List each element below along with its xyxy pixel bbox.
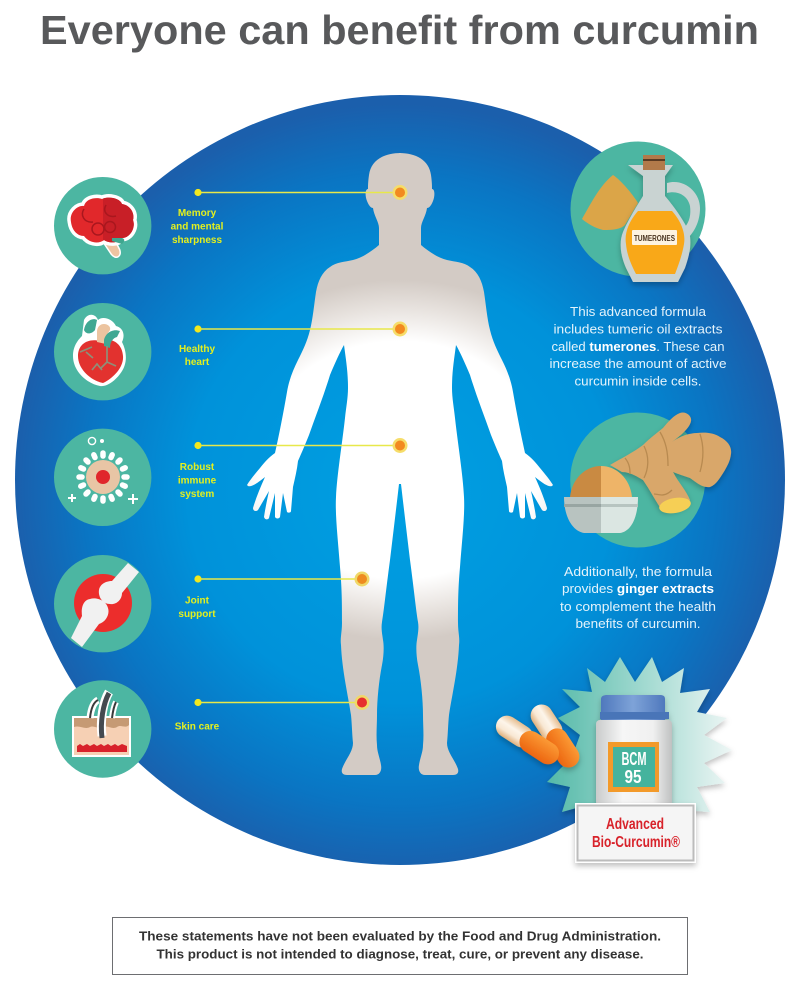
icon: joint [54,555,151,652]
bottle: 95 [624,767,642,787]
callout: immune: immune [178,476,217,486]
icon: tumerones oil and powder: TUMERONES [634,233,675,243]
text: ginger paragraph: Additionally, the formula [564,564,713,579]
capsules [492,700,584,772]
callout: skin [175,695,370,732]
icon: ginger and bowl [564,412,731,548]
callout: heart [179,322,408,368]
text: ginger paragraph: benefits of curcumin. [576,616,700,631]
product label: Bio-Curcumin® [592,834,680,851]
title: Everyone can benefit from curcumin [40,7,759,53]
callout: joint [178,572,370,620]
callout: immune: system [180,489,214,500]
text: tumerones paragraph: called tumerones. These can [552,339,724,354]
callout: immune [178,438,408,500]
callout: heart: heart [185,357,210,368]
text: tumerones paragraph [550,304,726,388]
icon: brain [54,177,151,274]
disclaimer box [112,918,688,974]
callout: heart: Healthy [179,344,215,355]
text: ginger paragraph [560,564,716,631]
callout: memory: sharpness [172,235,222,246]
callout: joint: Joint [185,596,210,606]
callout: immune: Robust [180,462,215,473]
product label [575,803,696,863]
callout: skin: Skin care [175,722,220,732]
icon: heart [54,303,151,400]
callout: memory: and mental [171,222,224,232]
text: tumerones paragraph: curcumin inside cells. [574,374,702,388]
starburst [547,657,732,830]
callout: memory [171,185,408,246]
bottle: BCM [622,749,646,769]
bottle [596,695,672,806]
text: tumerones paragraph: includes tumeric oil extracts [554,322,723,336]
text: tumerones paragraph: increase the amount of active [550,356,726,371]
disclaimer box: These statements have not been evaluated by the Food and Drug Administration. [139,928,661,944]
icon: tumerones oil and powder [570,142,706,282]
human body silhouette [247,153,553,775]
text: ginger paragraph: to complement the health [560,599,716,614]
text: ginger paragraph: provides ginger extracts [562,581,714,596]
icon: immune cell [54,429,151,526]
icon: skin [54,680,151,778]
text: tumerones paragraph: This advanced formula [570,304,707,319]
blue background circle [15,95,785,865]
callout: joint: support [178,609,216,620]
disclaimer box: This product is not intended to diagnose, treat, cure, or prevent any disease. [156,946,644,962]
product label: Advanced [606,816,664,833]
callout: memory: Memory [178,208,217,219]
product: Advanced Bio-Curcumin bottle [492,657,732,863]
